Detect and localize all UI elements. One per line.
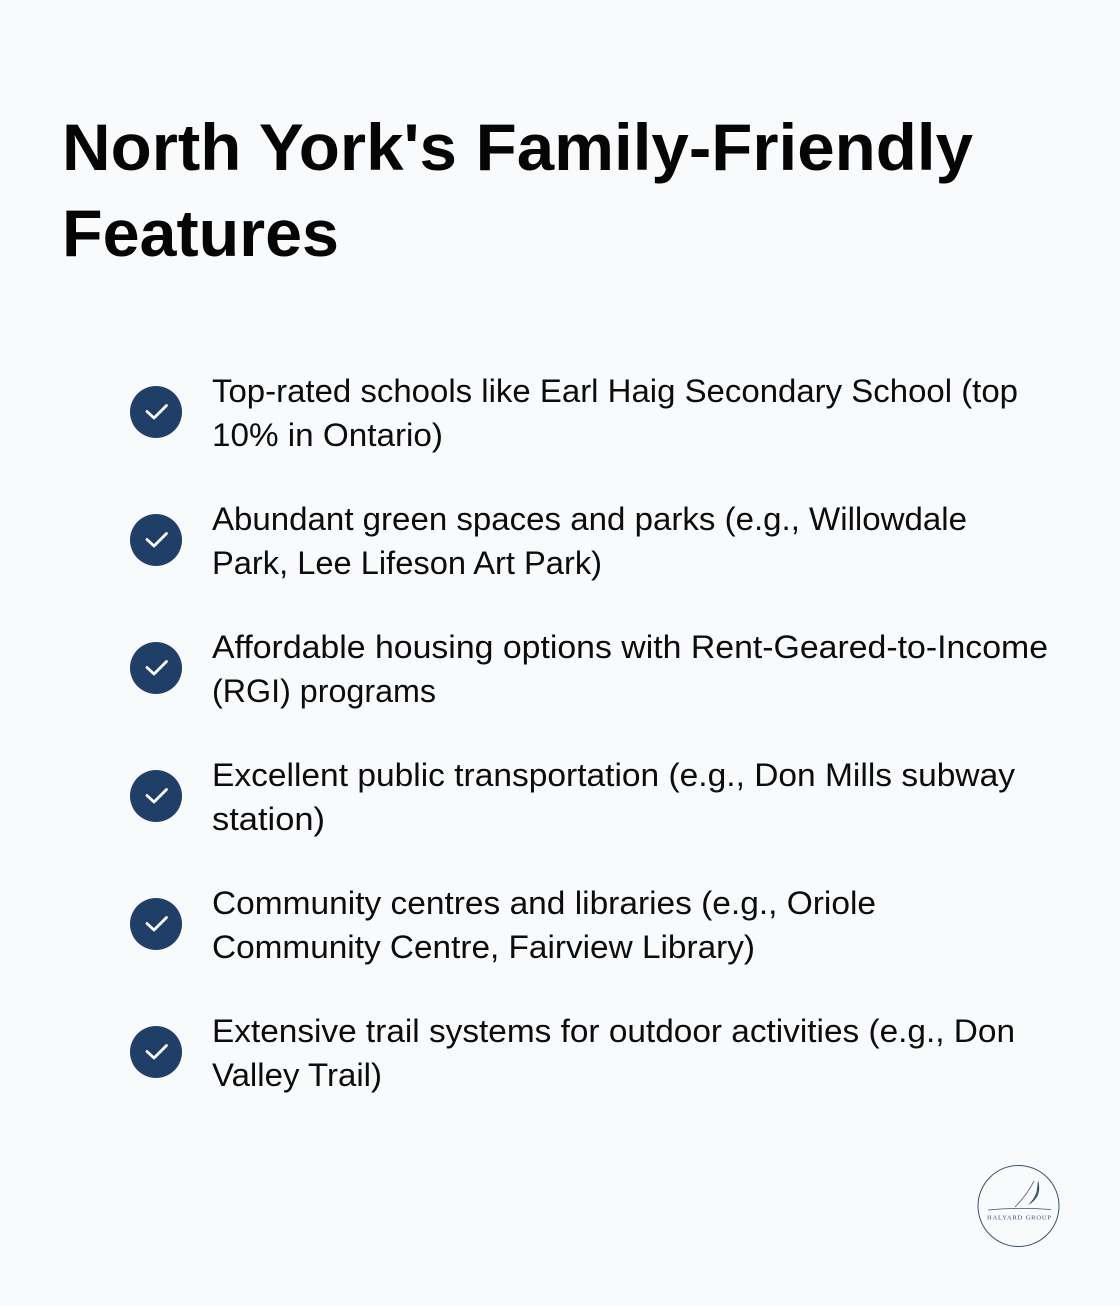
feature: trail systems (130, 1013, 1015, 1093)
feature: public transportation: Excellent public transportation (e.g., Don Mills subway (212, 757, 1015, 793)
feature: trail systems: Valley Trail) (212, 1057, 382, 1093)
title: Features (62, 196, 339, 270)
logo: Halyard Group: HALYARD GROUP (987, 1214, 1051, 1222)
logo: Halyard Group (978, 1166, 1059, 1246)
feature: green spaces (130, 501, 967, 581)
feature: public transportation (130, 757, 1015, 837)
feature: public transportation: station) (212, 801, 325, 837)
feature: affordable housing (130, 629, 1048, 709)
feature: top-rated schools: 10% in Ontario) (212, 417, 443, 453)
feature: community centres (130, 885, 876, 965)
feature: top-rated schools: Top-rated schools like Earl Haig Secondary School (top (212, 373, 1018, 409)
title: North York's Family-Friendly (62, 110, 973, 184)
feature list (130, 373, 1048, 1093)
feature: trail systems: Extensive trail systems for outdoor activities (e.g., Don (212, 1013, 1015, 1049)
feature: top-rated schools (130, 373, 1018, 453)
title (62, 110, 973, 270)
feature: affordable housing: Affordable housing options with Rent-Geared-to-Income (212, 629, 1048, 665)
feature: green spaces: Abundant green spaces and parks (e.g., Willowdale (212, 501, 967, 537)
feature: affordable housing: (RGI) programs (212, 673, 436, 709)
feature: community centres: Community Centre, Fairview Library) (212, 929, 755, 965)
feature: green spaces: Park, Lee Lifeson Art Park) (212, 545, 602, 581)
feature: community centres: Community centres and libraries (e.g., Oriole (212, 885, 876, 921)
